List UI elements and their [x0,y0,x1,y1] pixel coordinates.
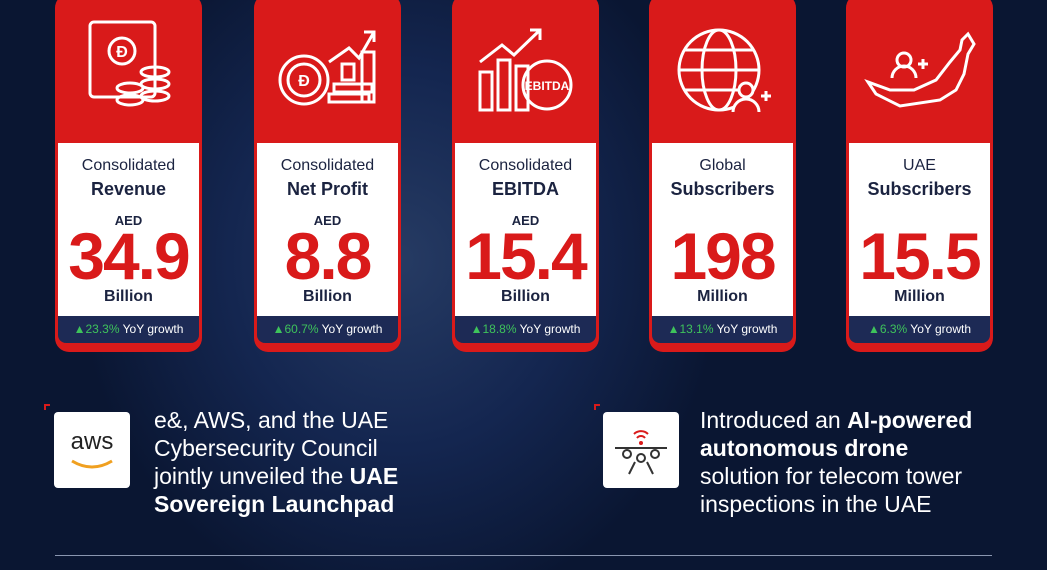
card: UAE subscribers: 15.5 [859,219,980,293]
card: EBITDA: AED [512,213,539,228]
card: net profit: AED [314,213,341,228]
card: UAE subscribers: UAE [903,157,936,174]
text: drone: inspections in the UAE [700,491,931,517]
card: net profit: Consolidated [281,157,374,174]
card: net profit: ▲60.7% YoY growth [273,322,382,336]
card: net profit: Net Profit [287,179,368,199]
icon: revenue [88,20,170,106]
news: drone [594,404,972,517]
card: revenue: Revenue [91,179,166,199]
icon: aws logo [54,412,130,488]
card: UAE subscribers: Million [894,288,945,305]
card: revenue: Consolidated [82,157,175,174]
card: net profit: Billion [303,288,352,305]
icon: net profit: Đ [298,73,310,90]
card: EBITDA: Consolidated [479,157,572,174]
icon: net profit [278,30,376,106]
card: EBITDA [452,0,599,352]
card: net profit [254,0,401,352]
card: net profit: 8.8 [285,219,370,293]
card: global subscribers: Million [697,288,748,305]
card: EBITDA: EBITDA [492,179,559,199]
news: AWS [44,404,398,517]
icon: aws logo: aws [71,428,113,455]
card: UAE subscribers [846,0,993,352]
icon: EBITDA [478,28,572,112]
card: EBITDA: 15.4 [465,219,586,293]
card: global subscribers [649,0,796,352]
icon: revenue: Đ [116,44,128,61]
icon: EBITDA: EBITDA [525,79,570,93]
text: drone: Introduced an AI-powered [700,407,972,433]
icon: globe [678,28,771,112]
card: UAE subscribers: ▲6.3% YoY growth [868,322,971,336]
text: drone: solution for telecom tower [700,463,962,489]
text: AWS launchpad: jointly unveiled the UAE [154,463,398,489]
text: AWS launchpad: e&, AWS, and the UAE [154,407,388,433]
card: global subscribers: Subscribers [670,179,775,199]
text: AWS launchpad: Sovereign Launchpad [154,491,394,517]
text: drone: autonomous drone [700,435,908,461]
card: EBITDA: Billion [501,288,550,305]
icon: drone [603,412,679,488]
card: revenue [55,0,202,352]
card: global subscribers: 198 [670,219,775,293]
text: drone [700,407,972,517]
card: revenue: 34.9 [68,219,189,293]
card: global subscribers: Global [699,157,746,174]
text: AWS launchpad [153,407,398,517]
card: revenue: Billion [104,288,153,305]
text: AWS launchpad: Cybersecurity Council [154,435,378,461]
card: global subscribers: ▲13.1% YoY growth [668,322,777,336]
card: EBITDA: ▲18.8% YoY growth [471,322,580,336]
card: revenue: AED [115,213,142,228]
card: UAE subscribers: Subscribers [867,179,972,199]
card: revenue: ▲23.3% YoY growth [74,322,183,336]
icon: UAE map [864,32,976,108]
